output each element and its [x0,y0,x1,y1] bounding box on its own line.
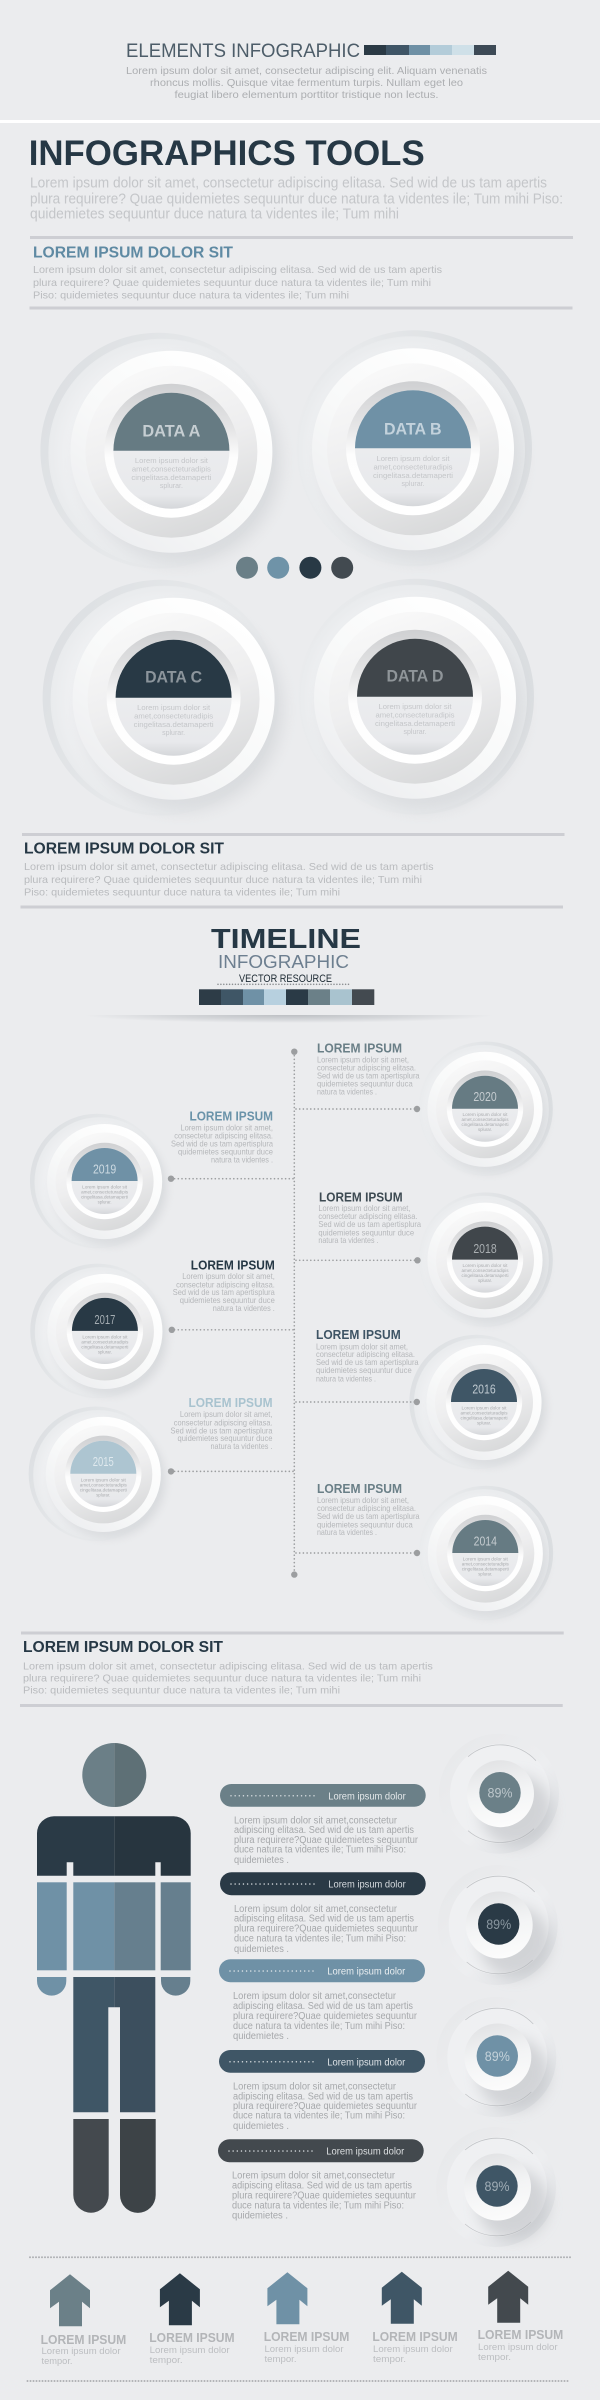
year circle 2015: 2015 [93,1455,114,1469]
subheading blue: LOREM IPSUM DOLOR SIT [33,244,234,262]
bar 1 text: quidemietes . [234,1855,289,1866]
arrow item 4: tempor. [373,2354,406,2365]
timeline text: 2020: consectetur adipiscing elitasa. [317,1062,416,1072]
arrow icon 1 [50,2274,90,2326]
data B text: Lorem ipsum dolor sit [377,454,450,463]
paragraph 2: plura requirere? Quae quidemietes sequuntur duce natura ta videntes ile; Tum mihi [23,1673,421,1685]
shoulders [37,1816,191,1876]
arrow item 2 [149,2273,235,2366]
subheading paragraph: plura requirere? Quae quidemietes sequuntur duce natura ta videntes ile; Tum mihi [33,277,431,289]
data B text [373,454,453,488]
bar 5 text: quidemietes . [232,2211,288,2222]
bar 2 text: adipiscing elitasa. Sed wid de us tam apertis [234,1914,414,1925]
arrow item 3: tempor. [264,2354,296,2365]
connector 2020 [296,1106,420,1112]
lower legs [73,2119,156,2213]
arrow icon 5 [488,2271,528,2323]
bar 5 text: adipiscing elitasa. Sed wid de us tam apertis [232,2181,412,2192]
year circle 2019: cingelitasa.detamaperti [81,1194,128,1200]
year circle 2020: 2020 [473,1090,497,1104]
circle: data D [298,579,534,815]
intro paragraph: Lorem ipsum dolor sit amet, consectetur adipiscing elitasa. Sed wid de us tam apertis [30,176,547,192]
bar 3 text [233,1991,418,2042]
hands [37,1977,190,1996]
year circle 2016: amet,consecteturadipis [460,1410,508,1416]
paragraph 2: Lorem ipsum dolor sit amet, consectetur adipiscing elitasa. Sed wid de us tam apertis [23,1661,433,1673]
paragraph [24,861,434,899]
data C text [134,703,214,737]
connector 2019 [168,1176,293,1182]
vector resource caption: VECTOR RESOURCE [239,973,332,985]
header description [126,65,487,101]
timeline text: 2016: consectetur adipiscing elitasa. [316,1349,415,1359]
data B text: splurar. [402,479,424,488]
intro paragraph: plura requirere? Quae quidemietes sequuntur duce natura ta videntes ile; Tum mihi Piso: [30,192,563,208]
year circle 2020: amet,consecteturadipis [461,1117,509,1122]
intro paragraph [30,176,563,222]
bar 3 [219,1959,425,1982]
bar 2 text: quidemietes . [234,1944,289,1955]
bar 1 text: adipiscing elitasa. Sed wid de us tam apertis [234,1825,414,1836]
header description: feugiat libero elementum porttitor tristique non lectus. [174,89,438,101]
timeline text: 2015: quidemietes sequuntur duce [178,1433,273,1443]
year circle 2020: cingelitasa.detamaperti [461,1122,509,1127]
arrow item 1: Lorem ipsum dolor [42,2346,120,2357]
arrow item 1: LOREM IPSUM [41,2333,126,2347]
connector 2016 [296,1399,420,1405]
bar 2: Lorem ipsum dolor [328,1878,406,1890]
data B label: DATA B [384,419,442,438]
timeline text: 2014: quidemietes sequuntur duca [317,1519,413,1529]
arrow item 5: LOREM IPSUM [478,2328,563,2342]
year circle 2016: 2016 [472,1383,496,1397]
year circle 2014: Lorem ipsum dolor sit [463,1556,509,1562]
percent circle 4: 89% [484,2178,510,2194]
data A label: DATA A [142,422,200,441]
heading 2015: LOREM IPSUM [188,1396,272,1410]
header title: ELEMENTS INFOGRAPHIC [126,41,360,62]
year circle 2014: amet,consecteturadipis [462,1562,510,1566]
year circle 2015: cingelitasa.detamaperti [80,1487,127,1492]
bar 3 text: quidemietes . [233,2031,289,2042]
timeline text: 2019 [171,1109,273,1164]
year circle 2018: cingelitasa.detamaperti [461,1273,509,1278]
arrow item 1: tempor. [42,2356,72,2367]
timeline text: 2015: consectetur adipiscing elitasa. [174,1417,272,1427]
circle: data A [40,333,280,569]
year circle 2017: 2017 [94,1313,115,1327]
timeline text: 2016: Sed wid de us tam apertisplura [316,1357,419,1367]
data B text: amet,consecteturadipis [374,462,453,471]
bar 1 text: plura requirere?Quae quidemietes sequuntur [234,1835,419,1846]
bar 4 text: quidemietes . [233,2121,289,2132]
bar 1 [220,1784,426,1807]
timeline title: TIMELINE [211,923,361,954]
arrow item 5: Lorem ipsum dolor [478,2342,558,2353]
timeline text: 2016: quidemietes sequuntur duce [316,1365,412,1375]
year circle 2018: Lorem ipsum dolor sit [462,1263,508,1268]
timeline text: 2020: natura ta videntes . [317,1086,377,1096]
year circle 2018: 2018 [473,1242,497,1256]
year circle 2017: cingelitasa.detamaperti [81,1344,128,1349]
year circle 2017: Lorem ipsum dolor sit [82,1334,128,1339]
bar 5 text [232,2171,417,2222]
timeline text: 2014: consectetur adipiscing elitasa. [317,1503,416,1513]
year circle 2014 [419,1486,553,1620]
timeline text: 2014: Lorem ipsum dolor sit amet, [317,1495,409,1505]
timeline text: 2019: quidemietes sequuntur duce [178,1146,273,1156]
year circle 2015 [29,1407,165,1541]
year circle 2017: splurar. [98,1349,112,1354]
percent circle 1: 89% [488,1785,512,1801]
year circle 2020 [418,1041,553,1176]
circle: data C [43,580,283,816]
year circle 2015: splurar. [96,1492,110,1497]
timeline text: 2017: quidemietes sequuntur duce [180,1295,275,1305]
timeline text: 2019: consectetur adipiscing elitasa. [174,1130,273,1140]
data D text: splurar. [404,727,426,736]
data D text: cingelitasa.detamaperti [375,719,455,728]
timeline text: 2017 [173,1258,275,1313]
data D text [375,702,455,736]
bar 3 text: duce natura ta videntes ile; Tum mihi Piso: [233,2021,405,2032]
data C text: amet,consecteturadipis [134,712,213,721]
heading 2018: LOREM IPSUM [319,1190,403,1204]
bar 1 text: duce natura ta videntes ile; Tum mihi Piso: [234,1845,406,1856]
bar 2 [220,1872,426,1895]
year circle 2014: cingelitasa.detamaperti [462,1566,509,1572]
year circle 2016 [409,1335,546,1469]
heading 2019: LOREM IPSUM [190,1109,273,1123]
bar 1: Lorem ipsum dolor [328,1790,406,1802]
timeline text: 2015: natura ta videntes . [210,1441,272,1451]
bar 1 text: Lorem ipsum dolor sit amet,consectetur [234,1816,398,1827]
timeline text: 2018: quidemietes sequuntur duce [318,1227,414,1237]
connector 2015 [168,1468,293,1475]
section: infographics tools [29,134,563,222]
timeline text: 2018 [318,1190,421,1245]
data C text: cingelitasa.detamaperti [134,720,214,729]
main title: INFOGRAPHICS TOOLS [29,134,425,173]
data A text: splurar. [160,481,183,490]
data D text: amet,consecteturadipis [376,711,455,720]
timeline text: 2019: natura ta videntes . [211,1154,273,1164]
colour legend dots [236,557,353,579]
infographic subtitle: INFOGRAPHIC [218,951,349,972]
bar 3 text: Lorem ipsum dolor sit amet,consectetur [233,1991,397,2002]
timeline text: 2018: Sed wid de us tam apertisplura [318,1219,421,1229]
bar 3 text: plura requirere?Quae quidemietes sequuntur [233,2011,418,2022]
timeline title block [199,923,374,1005]
bar 5 text: duce natura ta videntes ile; Tum mihi Piso: [232,2201,404,2212]
bar 2 text: duce natura ta videntes ile; Tum mihi Piso: [234,1934,406,1945]
percent circle 2: 89% [486,1916,511,1932]
timeline text: 2017: Sed wid de us tam apertisplura [173,1287,275,1297]
year circle 2016: cingelitasa.detamaperti [460,1416,508,1420]
timeline text: 2018: consectetur adipiscing elitasa. [318,1211,417,1221]
paragraph: Piso: quidemietes sequuntur duce natura ta videntes ile; Tum mihi [24,887,340,899]
timeline text: 2020: Sed wid de us tam apertisplura [317,1070,420,1080]
heading 2016: LOREM IPSUM [316,1328,401,1342]
year circle 2015: amet,consecteturadipis [80,1482,128,1487]
year circle 2018 [418,1192,553,1327]
paragraph: Lorem ipsum dolor sit amet, consectetur adipiscing elitasa. Sed wid de us tam apertis [24,861,434,873]
timeline text: 2014: natura ta videntes . [317,1527,377,1537]
bar 5 text: Lorem ipsum dolor sit amet,consectetur [232,2171,396,2182]
head [82,1743,146,1807]
subheading paragraph: Lorem ipsum dolor sit amet, consectetur adipiscing elitasa. Sed wid de us tam apertis [33,264,442,276]
subheading paragraph: Piso: quidemietes sequuntur duce natura ta videntes ile; Tum mihi [33,290,349,302]
arrow item 3 [264,2272,349,2365]
bar 4 text: adipiscing elitasa. Sed wid de us tam apertis [233,2092,413,2103]
percent circle 2 [438,1865,558,1985]
heading 2017: LOREM IPSUM [191,1258,275,1272]
arrow item 2: Lorem ipsum dolor [150,2345,230,2356]
timeline text: 2015 [170,1396,273,1451]
torso and arms [37,1882,191,1970]
year circle 2019: Lorem ipsum dolor sit [82,1184,128,1190]
bar 5: Lorem ipsum dolor [326,2146,405,2158]
arrow icon 3 [267,2272,307,2324]
arrow icon 2 [160,2273,200,2325]
arrow item 1 [41,2274,126,2367]
timeline text: 2020 [317,1041,420,1096]
data C text: Lorem ipsum dolor sit [137,703,211,712]
timeline text: 2017: natura ta videntes . [213,1303,275,1313]
arrow item 2: LOREM IPSUM [149,2331,235,2345]
heading dark: LOREM IPSUM DOLOR SIT [24,840,225,858]
timeline text: 2017: consectetur adipiscing elitasa. [176,1279,275,1289]
arrow icon 4 [382,2272,422,2324]
year circle 2014: 2014 [474,1534,497,1548]
year circle 2017 [30,1264,167,1398]
timeline text: 2014 [317,1482,420,1537]
bar 3: Lorem ipsum dolor [327,1966,406,1978]
year circle 2018: amet,consecteturadipis [461,1268,509,1273]
year circle 2020: splurar. [478,1127,492,1132]
year circle 2020: Lorem ipsum dolor sit [462,1112,508,1117]
circle: data B [296,330,532,566]
percent circle 3: 89% [485,2048,510,2064]
data A text: cingelitasa.detamaperti [131,473,212,482]
timeline text: 2020: Lorem ipsum dolor sit amet, [317,1054,409,1064]
arrow item 4: LOREM IPSUM [372,2330,458,2344]
bar 2 text: Lorem ipsum dolor sit amet,consectetur [234,1904,398,1915]
year circle 2019: 2019 [93,1162,116,1176]
header description: rhoncus mollis. Quisque vitae fermentum turpis. Nullam eget leo [150,77,463,89]
trousers [73,1977,155,2112]
subheading paragraph [33,264,442,302]
arrow item 3: LOREM IPSUM [264,2330,349,2344]
timeline text: 2018: Lorem ipsum dolor sit amet, [318,1203,410,1213]
bar 2 text: plura requirere?Quae quidemietes sequuntur [234,1924,419,1935]
percent circle 1 [439,1734,559,1854]
arrow item 5 [478,2271,563,2363]
bar 5 [218,2139,424,2162]
arrow item 3: Lorem ipsum dolor [264,2344,344,2355]
data A text: amet,consecteturadipis [132,465,211,474]
timeline colour strip [199,989,374,1005]
data D text: Lorem ipsum dolor sit [379,702,452,711]
year circle 2019: splurar. [98,1200,112,1204]
timeline text: 2017: Lorem ipsum dolor sit amet, [182,1271,275,1281]
timeline text: 2015: Sed wid de us tam apertisplura [170,1425,273,1435]
paragraph: plura requirere? Quae quidemietes sequuntur duce natura ta videntes ile; Tum mihi [24,874,422,886]
year circle 2017: amet,consecteturadipis [81,1339,129,1344]
year circle 2019: amet,consecteturadipis [81,1190,129,1194]
data D label: DATA D [386,667,444,686]
heading 2014: LOREM IPSUM [317,1482,402,1496]
arrow item 4: Lorem ipsum dolor [373,2344,453,2355]
data A text: Lorem ipsum dolor sit [135,456,209,465]
year circle 2015: Lorem ipsum dolor sit [81,1477,127,1482]
data B text: cingelitasa.detamaperti [373,471,453,480]
heading dark 2: LOREM IPSUM DOLOR SIT [23,1639,224,1656]
data C text: splurar. [162,728,185,737]
timeline text: 2020: quidemietes sequuntur duca [317,1078,413,1088]
arrow item 2: tempor. [150,2355,183,2366]
paragraph 2: Piso: quidemietes sequuntur duce natura ta videntes ile; Tum mihi [23,1685,340,1697]
data C label: DATA C [145,668,202,687]
year circle 2018: splurar. [478,1278,492,1283]
connector 2018 [296,1257,421,1264]
year circle 2014: splurar. [478,1572,492,1576]
intro paragraph: quidemietes sequuntur duce natura ta videntes ile; Tum mihi [30,206,399,222]
connector 2014 [296,1550,420,1556]
connector 2017 [169,1327,293,1333]
bar 4 [219,2050,425,2073]
header description: Lorem ipsum dolor sit amet, consectetur adipiscing elit. Aliquam venenatis [126,65,487,77]
bar 3 text: adipiscing elitasa. Sed wid de us tam apertis [233,2001,413,2012]
timeline text: 2016: Lorem ipsum dolor sit amet, [316,1341,408,1351]
timeline text: 2019: Lorem ipsum dolor sit amet, [180,1122,273,1132]
timeline text: 2019: Sed wid de us tam apertisplura [171,1138,273,1148]
timeline text: 2016 [316,1328,419,1383]
arrow item 4 [372,2272,458,2365]
heading 2020: LOREM IPSUM [317,1041,402,1055]
header colour strip [364,45,496,55]
timeline axis [291,1048,297,1578]
bar 4 text: duce natura ta videntes ile; Tum mihi Piso: [233,2111,405,2122]
year circle 2016: Lorem ipsum dolor sit [462,1406,507,1410]
year circle 2016: splurar. [477,1420,491,1426]
arrow item 5: tempor. [478,2352,511,2363]
bar 5 text: plura requirere?Quae quidemietes sequuntur [232,2191,417,2202]
bar 4 text [233,2082,418,2132]
bar 4: Lorem ipsum dolor [327,2056,406,2068]
header: elements infographic [126,41,496,101]
bar 1 text [234,1816,419,1866]
timeline text: 2015: Lorem ipsum dolor sit amet, [180,1409,272,1419]
timeline text: 2018: natura ta videntes . [318,1235,378,1245]
timeline text: 2016: natura ta videntes . [316,1373,376,1383]
paragraph 2 [23,1661,433,1697]
bar 4 text: Lorem ipsum dolor sit amet,consectetur [233,2082,397,2093]
percent circle 4 [436,2127,556,2247]
bar 2 text [234,1904,419,1955]
data A text [131,456,212,490]
percent circle 3 [436,1997,556,2117]
timeline text: 2014: Sed wid de us tam apertisplura [317,1511,420,1521]
bar 4 text: plura requirere?Quae quidemietes sequuntur [233,2101,418,2112]
human figure [37,1743,191,2213]
year circle 2019 [30,1114,167,1248]
